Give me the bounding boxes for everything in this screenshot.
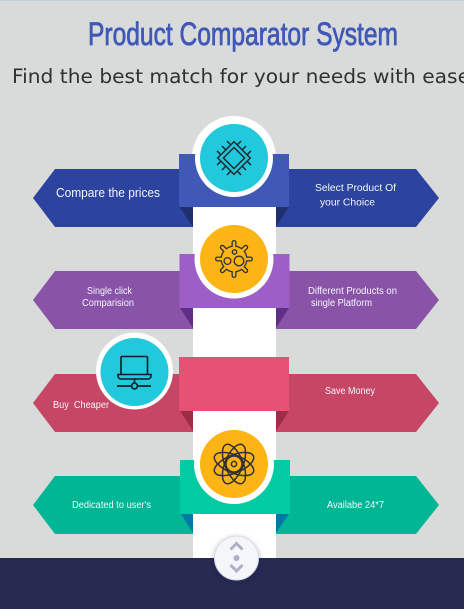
right arrow: select product: [276, 169, 439, 227]
left arrow: buy cheaper: Buy Cheaper: [53, 400, 110, 411]
band folds: [180, 207, 289, 227]
ribbon 2: purple: [33, 220, 439, 329]
left arrow: dedicated: [33, 476, 193, 534]
right arrow: different products: single Platform: [311, 298, 372, 309]
center band: [180, 460, 290, 514]
footer bar: [0, 558, 464, 609]
right arrow: available: [276, 476, 439, 534]
left arrow: single click: Single click: [87, 286, 133, 297]
left arrow: buy cheaper: [33, 374, 193, 432]
center band: [180, 254, 290, 308]
ribbon 4: green: [33, 424, 439, 534]
left arrow: single click: [33, 271, 193, 329]
left arrow: dedicated: Dedicated to user's: [72, 500, 151, 511]
band folds: [180, 308, 289, 328]
icon: gear: [194, 220, 274, 298]
white halo behind the first circle: [192, 116, 276, 200]
right arrow: different products: [276, 271, 439, 329]
left arrow: compare the prices: Compare the prices: [56, 186, 160, 200]
ribbon 1: blue: [33, 116, 439, 227]
subtitle: Find the best match for your needs with ease: [12, 65, 464, 88]
scroll button: [214, 536, 258, 580]
icon: atom: [194, 424, 274, 504]
right arrow: different products: Different Products on: [308, 286, 397, 297]
ribbon 3: red: [33, 332, 439, 432]
band folds: [180, 411, 289, 431]
right arrow: save money: [276, 374, 439, 432]
left arrow: compare the prices: [33, 169, 193, 227]
center band: [179, 357, 289, 411]
right arrow: available: Availabe 24*7: [327, 500, 384, 511]
left arrow: single click: Comparision: [82, 298, 134, 309]
band folds: [181, 514, 289, 533]
right arrow: select product: Select Product Of: [315, 182, 396, 194]
right arrow: save money: Save Money: [325, 386, 375, 397]
icon: networked laptop: [96, 332, 173, 410]
icon: microchip: [195, 119, 273, 197]
right arrow: select product: your Choice: [320, 196, 375, 208]
center band: [179, 154, 289, 207]
white central column: [193, 190, 276, 558]
